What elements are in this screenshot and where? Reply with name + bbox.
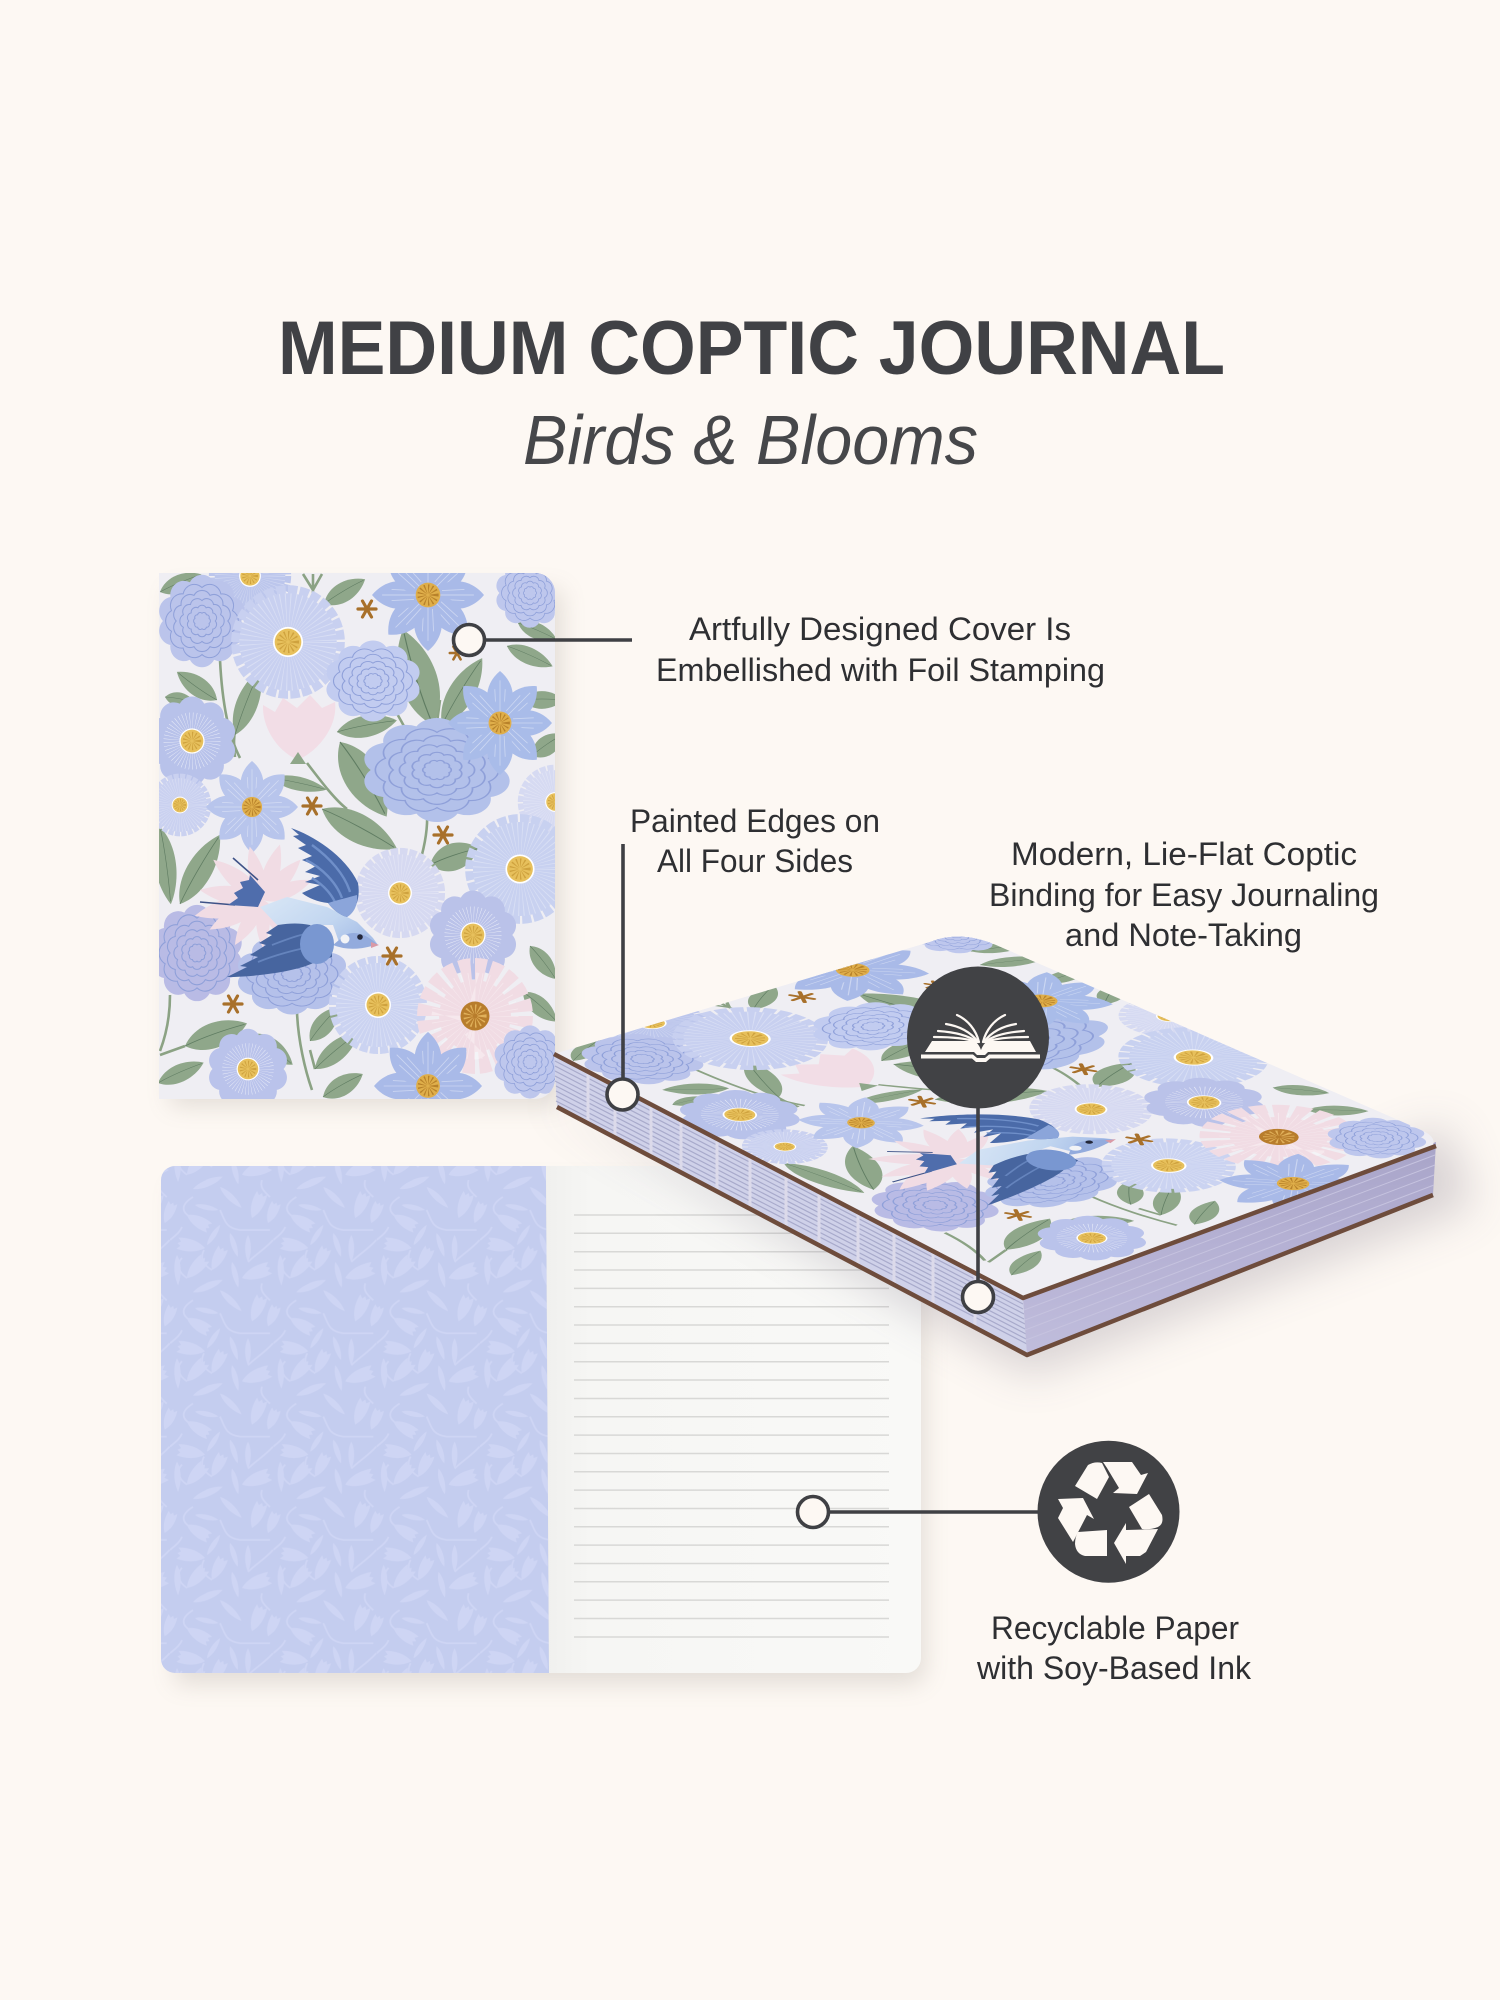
panel: angled journal showing coptic binding [553,936,1480,1384]
panel: journal front cover [159,573,568,1112]
callout: recyclable paper [798,1441,1180,1583]
callout dot [454,624,484,656]
title: MEDIUM COPTIC JOURNAL [278,306,1225,391]
callout dot [607,1079,638,1110]
subtitle: Birds & Blooms [523,401,978,479]
label: painted edges: Painted Edges on [630,803,880,839]
right lined page [546,1166,921,1673]
callout: painted edges [607,844,638,1110]
label: lie-flat coptic binding: Binding for Easy Journaling [989,877,1379,913]
ruled lines [574,1215,889,1637]
label: recyclable paper: with Soy-Based Ink [976,1650,1252,1686]
label: painted edges [630,803,880,879]
label: recyclable paper [976,1610,1252,1686]
panel: open journal pages [161,1166,925,1684]
floral cover illustration [159,573,555,1099]
label: recyclable paper: Recyclable Paper [991,1610,1239,1646]
label: lie-flat coptic binding: Modern, Lie-Flat Coptic [1011,836,1357,872]
callout dot [962,1282,994,1312]
label: artfully designed cover: Embellished with Foil Stamping [656,652,1105,688]
leader line [829,1510,1040,1514]
icon: open book [907,966,1049,1108]
leader line [621,844,625,1079]
label: artfully designed cover: Artfully Designed Cover Is [689,611,1071,647]
icon: recycle symbol [1038,1441,1180,1583]
label: painted edges: All Four Sides [657,843,853,879]
board edges [554,1054,1436,1355]
left endpaper with leaf pattern [161,1166,551,1674]
leader line [976,1105,980,1282]
fore edge painted lavender [1023,1142,1436,1355]
floral cover in perspective [558,936,1434,1296]
callout: lie-flat binding [907,966,1049,1312]
callout dot [798,1496,828,1528]
spine with exposed stitching [554,1054,1027,1355]
label: lie-flat coptic binding: and Note-Taking [1065,917,1302,953]
leader line [485,638,632,642]
label: lie-flat coptic binding [989,836,1379,953]
callout: artfully designed cover [454,624,632,656]
label: artfully designed cover [656,611,1105,688]
swallow illustration [193,828,379,977]
